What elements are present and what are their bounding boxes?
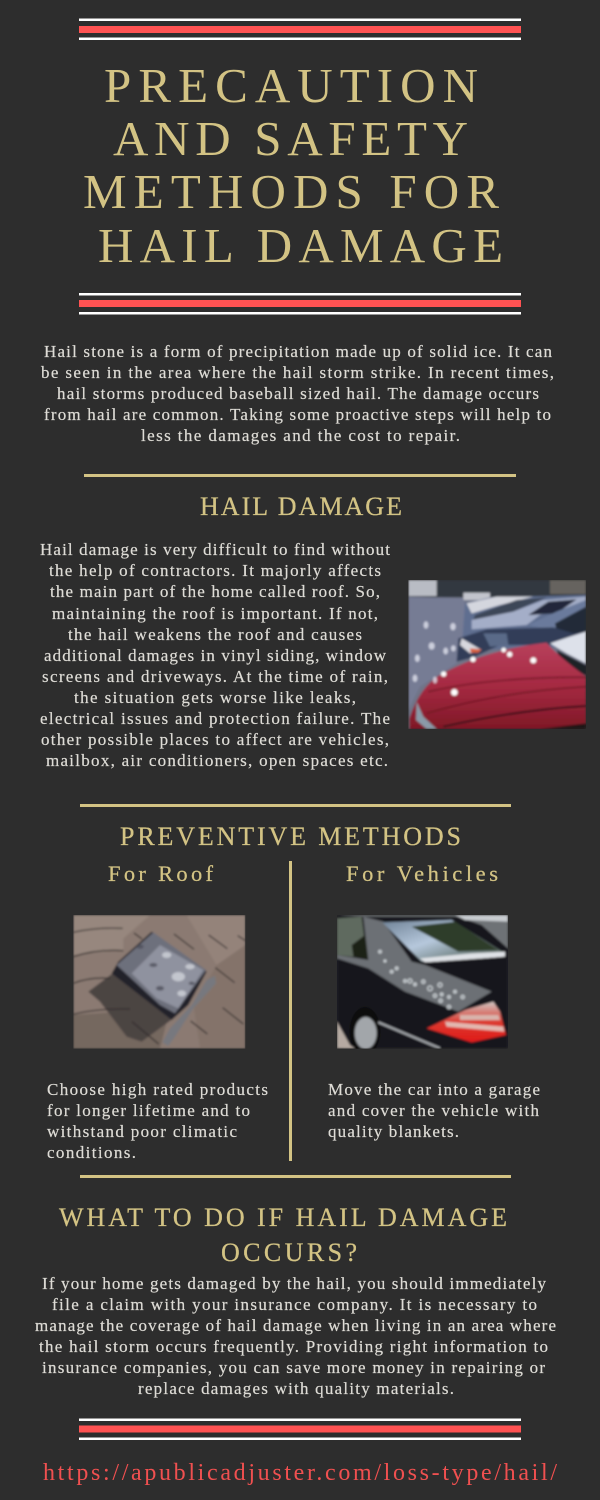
what to do text: the hail storm occurs frequently. Providing right information to [39,1337,548,1356]
roof text: conditions. [47,1143,136,1162]
title: METHODS FOR [83,164,499,219]
title lower bars [79,293,521,314]
roof text: for longer lifetime and to [47,1101,250,1120]
what to do text: If your home gets damaged by the hail, you should immediately [42,1274,546,1293]
bottom decorative bars [79,1418,521,1440]
heading: what to do: OCCURS? [221,1238,357,1267]
heading: preventive methods: PREVENTIVE METHODS [120,822,461,851]
intro text: be seen in the area where the hail storm strike. In recent times, [41,363,554,382]
photo: dented roof vent [73,915,246,1049]
intro text: less the damages and the cost to repair. [141,426,460,445]
what to do text: manage the coverage of hail damage when living in an area where [35,1316,556,1335]
hail damage text [40,540,390,770]
what to do text: insurance companies, you can save more money in repairing or [42,1358,545,1377]
photo: hail on parked cars [408,580,586,729]
heading: what to do: WHAT TO DO IF HAIL DAMAGE [59,1203,507,1232]
hail damage text: the situation gets worse like leaks, [74,688,356,707]
title: PRECAUTION [104,58,478,113]
hail damage text: the main part of the home called roof. So, [50,582,380,601]
what to do text [35,1274,556,1398]
vehicles text: Move the car into a garage [328,1080,540,1099]
hail damage text: other possible places to affect are vehicles, [41,730,389,749]
roof text: withstand poor climatic [47,1122,237,1141]
title: HAIL DAMAGE [98,218,503,273]
vehicles text: and cover the vehicle with [328,1101,540,1120]
hail damage text: Hail damage is very difficult to find without [40,540,390,559]
subheading: for roof: For Roof [108,861,214,886]
hail damage text: additional damages in vinyl siding, window [44,646,387,665]
title [83,58,503,273]
what to do text: replace damages with quality materials. [138,1379,454,1398]
heading: what to do [59,1203,507,1267]
hail damage text: mailbox, air conditioners, open spaces etc. [46,751,388,770]
roof text: Choose high rated products [47,1080,268,1099]
subheading: for vehicles: For Vehicles [346,861,498,886]
vehicles text: quality blankets. [328,1122,459,1141]
title: AND SAFETY [113,111,468,166]
what to do text: file a claim with your insurance company. It is necessary to [52,1295,537,1314]
heading: hail damage: HAIL DAMAGE [200,492,402,521]
intro text: from hail are common. Taking some proactive steps will help to [44,405,551,424]
top decorative bars [79,18,521,40]
roof text [47,1080,268,1162]
intro text: hail storms produced baseball sized hail. The damage occurs [57,384,539,403]
hail damage text: the hail weakens the roof and causes [68,625,362,644]
intro text [41,342,554,445]
hail damage text: screens and driveways. At the time of rain, [42,667,388,686]
vehicles text [328,1080,540,1141]
intro text: Hail stone is a form of precipitation made up of solid ice. It can [44,342,552,361]
hail damage text: maintaining the roof is important. If not, [52,604,378,623]
source link: https://apublicadjuster.com/loss-type/hail/ [43,1460,557,1486]
hail damage text: electrical issues and protection failure. The [40,709,390,728]
photo: dented black car [337,915,508,1049]
hail damage text: the help of contractors. It majorly affects [49,561,381,580]
